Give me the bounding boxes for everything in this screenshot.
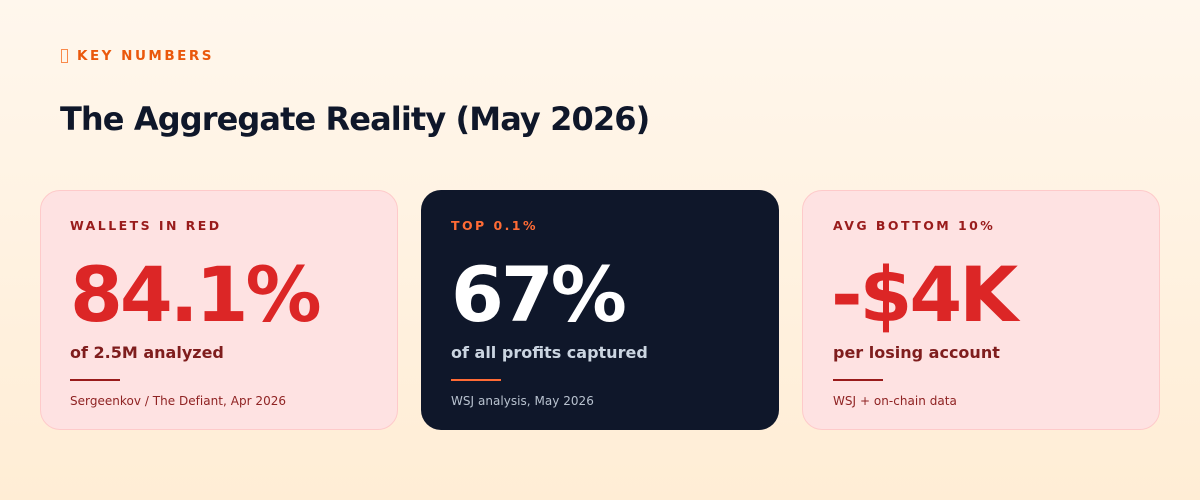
subtext: of 2.5M analyzed: of 2.5M analyzed xyxy=(70,343,224,362)
title: The Aggregate Reality (May 2026) xyxy=(60,100,649,138)
subtext: of all profits captured: of all profits captured xyxy=(451,343,648,362)
label: avg bottom 10%: AVG BOTTOM 10% xyxy=(833,218,995,233)
panel: top 0.1% xyxy=(421,190,779,430)
eyebrow: key numbers: KEY NUMBERS xyxy=(77,48,214,64)
source: WSJ + on-chain data: WSJ + on-chain data xyxy=(833,394,957,408)
panel: avg bottom 10% xyxy=(802,190,1160,430)
source: Sergeenkov: Sergeenkov / The Defiant, Apr 2026 xyxy=(70,394,286,408)
big number: -$4K: -$4K xyxy=(831,250,1015,339)
panel: wallets in red xyxy=(40,190,398,430)
label: wallets in red: WALLETS IN RED xyxy=(70,218,222,233)
subtext: per losing account: per losing account xyxy=(833,343,1000,362)
label: top 0.1%: TOP 0.1% xyxy=(451,218,538,233)
big number: 67%: 67% xyxy=(451,250,624,339)
big number: 84.1%: 84.1% xyxy=(70,250,319,339)
source: WSJ analysis: WSJ analysis, May 2026 xyxy=(451,394,594,408)
